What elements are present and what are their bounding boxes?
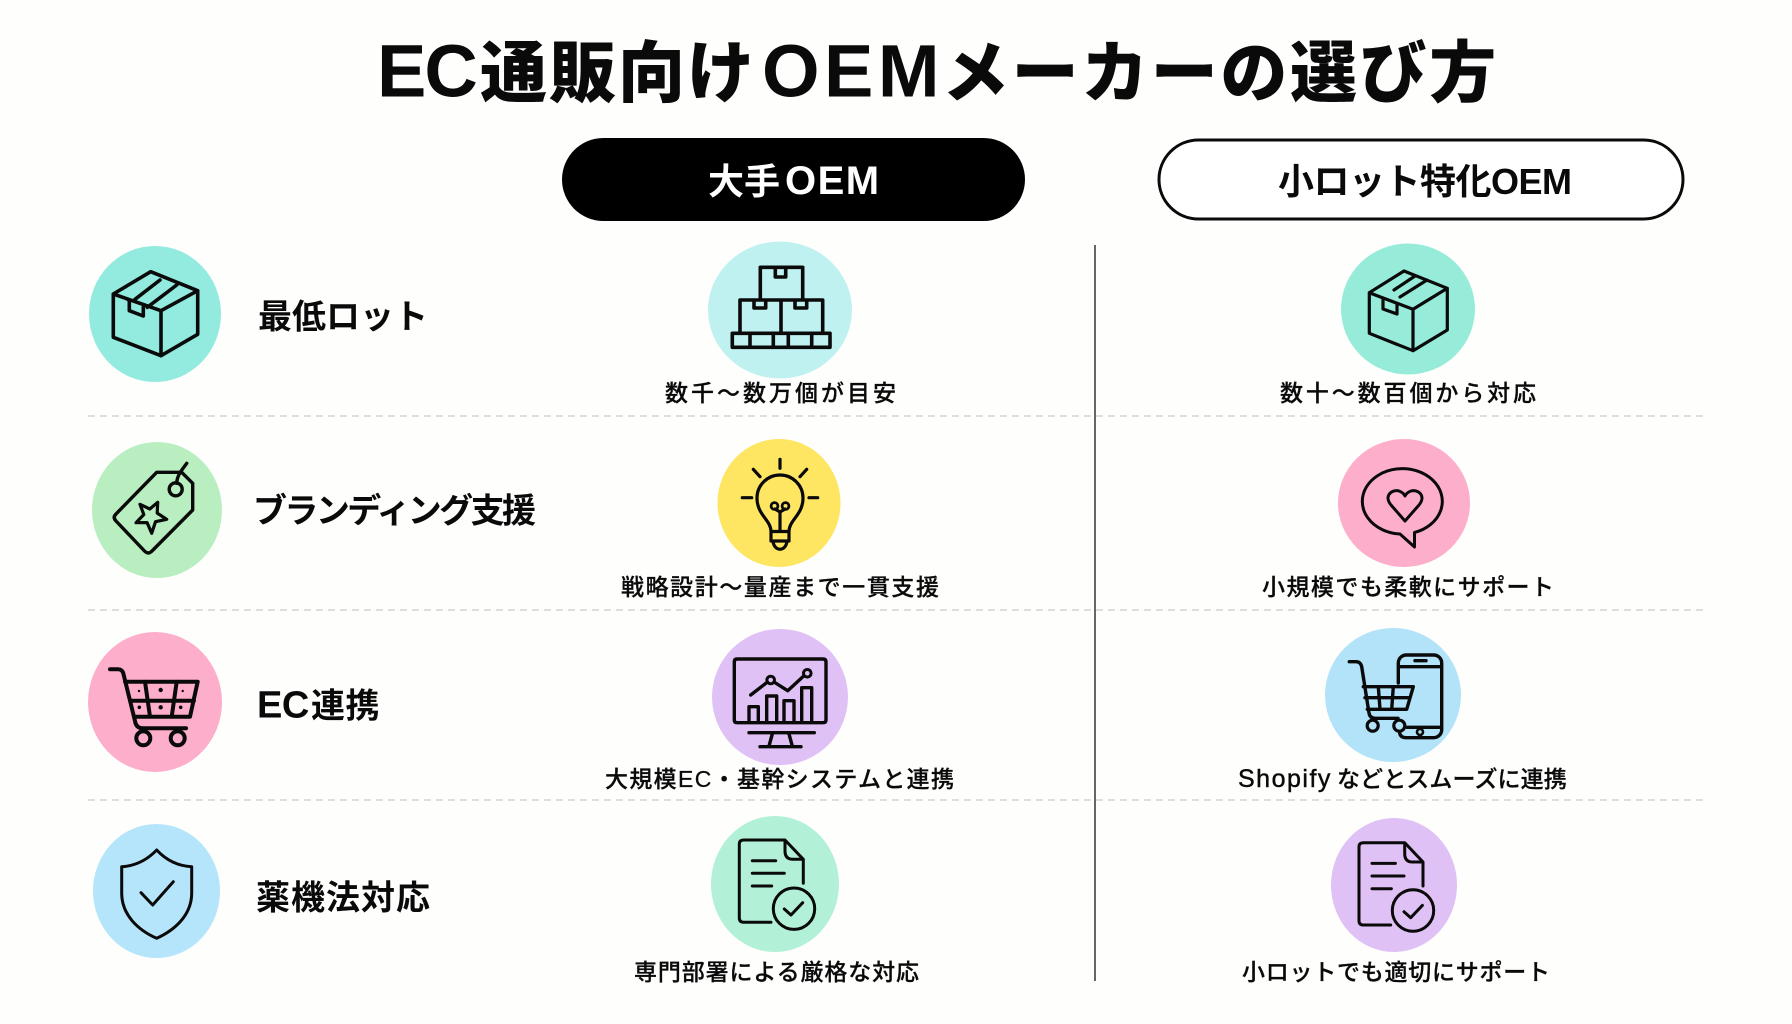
column header: 小ロット特化OEM xyxy=(1159,140,1683,219)
label: 最低ロット xyxy=(258,298,428,336)
row: ブランディング支援 xyxy=(92,439,1554,600)
icon: shield with check xyxy=(93,824,220,958)
label: 薬機法対応 xyxy=(256,880,430,918)
small-lot OEM: box icon xyxy=(1341,244,1475,374)
large OEM: document with check icon xyxy=(711,816,839,952)
small-lot OEM: text: などとスムーズに連携 xyxy=(1337,766,1567,792)
small-lot OEM: text: Shopify xyxy=(1238,765,1332,793)
row: EC連携 xyxy=(88,628,1567,793)
large OEM: pallet icon xyxy=(708,242,852,378)
small-lot OEM: speech bubble with heart icon xyxy=(1338,439,1470,567)
column header: 大手OEM: OEM xyxy=(785,159,881,203)
title: 通販向け xyxy=(480,36,756,112)
column header: 大手OEM xyxy=(562,138,1025,221)
large OEM: text: 大規模EC・基幹システムと連携 xyxy=(605,766,954,792)
small-lot OEM: cart and smartphone icon xyxy=(1325,628,1461,762)
column header: 小ロット特化OEM: 小ロット特化OEM xyxy=(1278,161,1572,202)
small-lot OEM: text: 小ロットでも適切にサポート xyxy=(1242,959,1550,985)
small-lot OEM: text: 数十〜数百個から対応 xyxy=(1280,380,1536,406)
large OEM: light bulb icon xyxy=(718,439,840,567)
title: EC xyxy=(377,30,476,112)
label: ブランディング支援 xyxy=(253,492,536,530)
icon: price tag with star xyxy=(92,442,222,578)
large OEM: text: 専門部署による厳格な対応 xyxy=(634,959,919,985)
large OEM: text: 戦略設計〜量産まで一貫支援 xyxy=(621,574,939,600)
small-lot OEM: document with check icon xyxy=(1331,818,1457,952)
icon: cardboard box xyxy=(89,246,221,382)
title: メーカーの選び方 xyxy=(942,36,1499,112)
title: OEM xyxy=(762,30,944,112)
small-lot OEM: text: 小規模でも柔軟にサポート xyxy=(1262,574,1554,600)
large OEM: monitor with chart icon xyxy=(712,629,848,765)
label: EC xyxy=(257,684,309,726)
icon: shopping cart xyxy=(88,632,222,772)
row: 最低ロット xyxy=(89,242,1536,406)
row: 薬機法対応 xyxy=(93,816,1550,985)
column header: 大手OEM: 大手 xyxy=(708,161,780,202)
large OEM: text: 数千〜数万個が目安 xyxy=(665,380,896,406)
label: 連携 xyxy=(311,688,380,726)
